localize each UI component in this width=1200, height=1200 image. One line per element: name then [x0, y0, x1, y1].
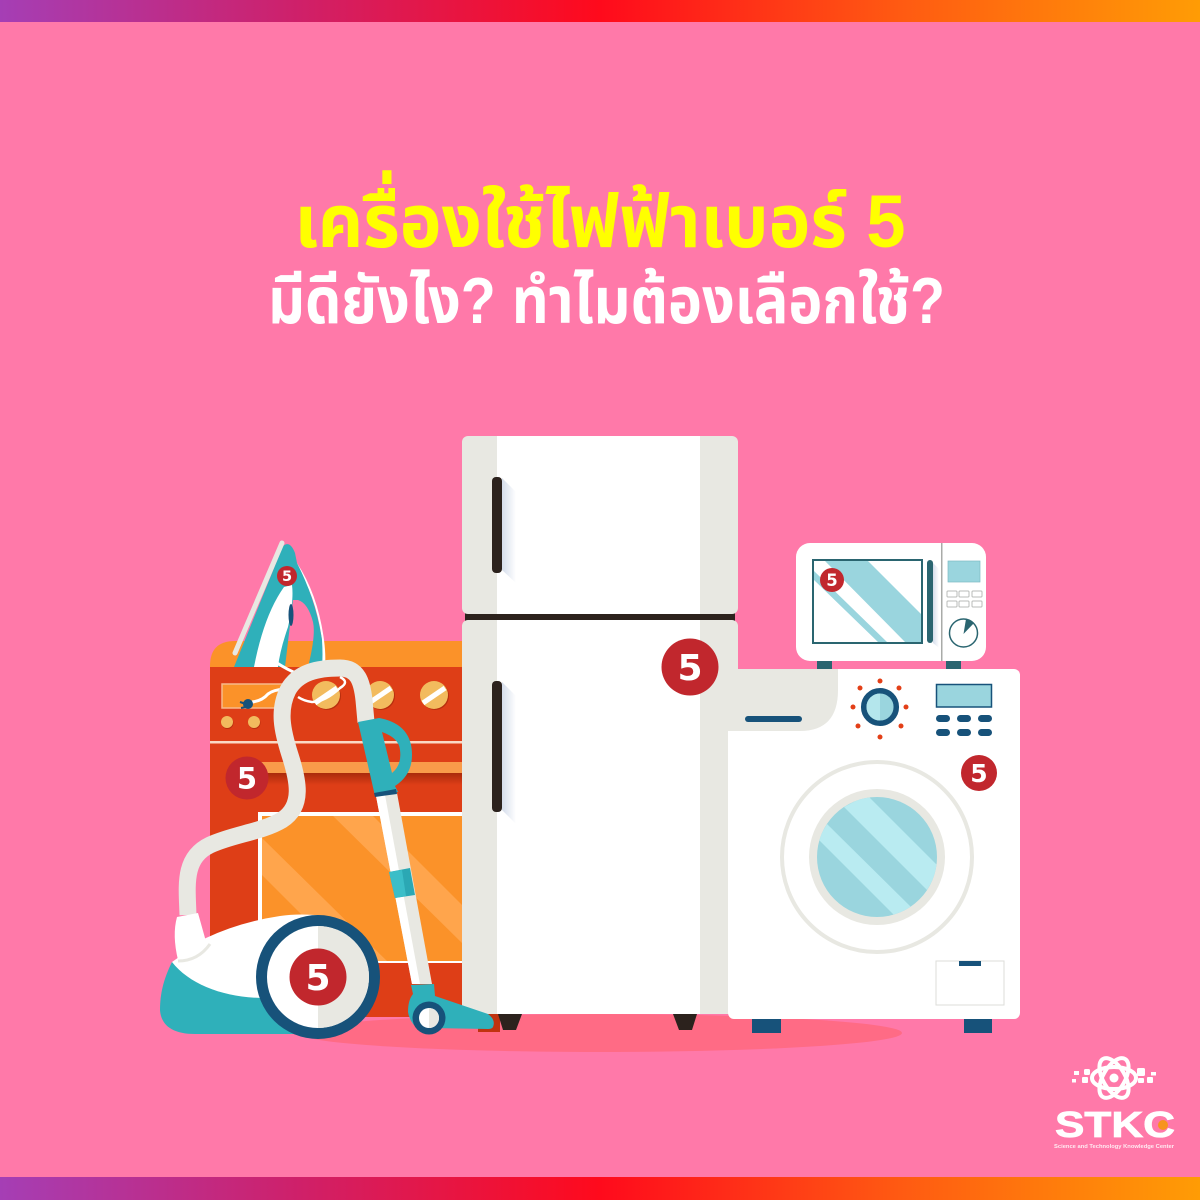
title line 1: เครื่องใช้ไฟฟ้าเบอร์ 5 — [294, 170, 906, 263]
vacuum badge: 5 — [305, 958, 331, 999]
oven badge: 5 — [237, 762, 257, 796]
fridge feet — [498, 1014, 697, 1030]
STKC logo — [1054, 1053, 1175, 1150]
oven knobs — [221, 681, 449, 729]
microwave — [796, 543, 986, 671]
fridge badge — [662, 638, 718, 696]
bottom gradient bar — [0, 1177, 1200, 1200]
fridge top door — [462, 436, 738, 614]
washer door — [782, 762, 972, 952]
oven badge — [226, 756, 268, 800]
logo tagline: Science and Technology Knowledge Center — [1054, 1144, 1175, 1150]
fridge badge: 5 — [677, 648, 703, 689]
microwave buttons — [947, 591, 982, 607]
logo wordmark: STKC — [1055, 1104, 1175, 1145]
microwave dial — [950, 619, 978, 647]
washer drawer — [936, 961, 1004, 1005]
vacuum hose — [187, 668, 366, 915]
oven window — [258, 812, 462, 963]
iron badge: 5 — [282, 569, 292, 585]
fridge bottom door — [462, 620, 738, 1014]
vacuum cleaner — [160, 668, 494, 1039]
iron — [234, 543, 325, 667]
fridge — [462, 436, 738, 1030]
title — [268, 170, 945, 337]
floor shadow — [298, 1014, 902, 1052]
washer badge — [961, 755, 997, 791]
vacuum body — [160, 913, 325, 1034]
washer buttons — [936, 715, 992, 736]
power cord — [240, 663, 345, 709]
washer top panel — [728, 669, 838, 731]
vacuum wheel — [256, 915, 380, 1039]
microwave badge — [820, 568, 844, 592]
oven — [210, 641, 500, 1032]
vacuum handle — [358, 718, 412, 796]
logo orange dot — [1158, 1120, 1168, 1130]
microwave badge: 5 — [826, 571, 838, 590]
washer badge: 5 — [970, 759, 988, 788]
title line 2: มีดียังไง? ทำไมต้องเลือกใช้? — [268, 264, 945, 337]
microwave window — [813, 560, 922, 643]
washer display — [936, 684, 992, 707]
oven handle — [250, 762, 462, 785]
washing machine — [728, 669, 1020, 1033]
microwave display — [948, 561, 980, 582]
top gradient bar — [0, 0, 1200, 22]
logo atom icon — [1072, 1053, 1156, 1103]
vacuum nozzle — [408, 984, 494, 1034]
vacuum wand — [358, 718, 432, 984]
washer dial — [850, 678, 908, 740]
